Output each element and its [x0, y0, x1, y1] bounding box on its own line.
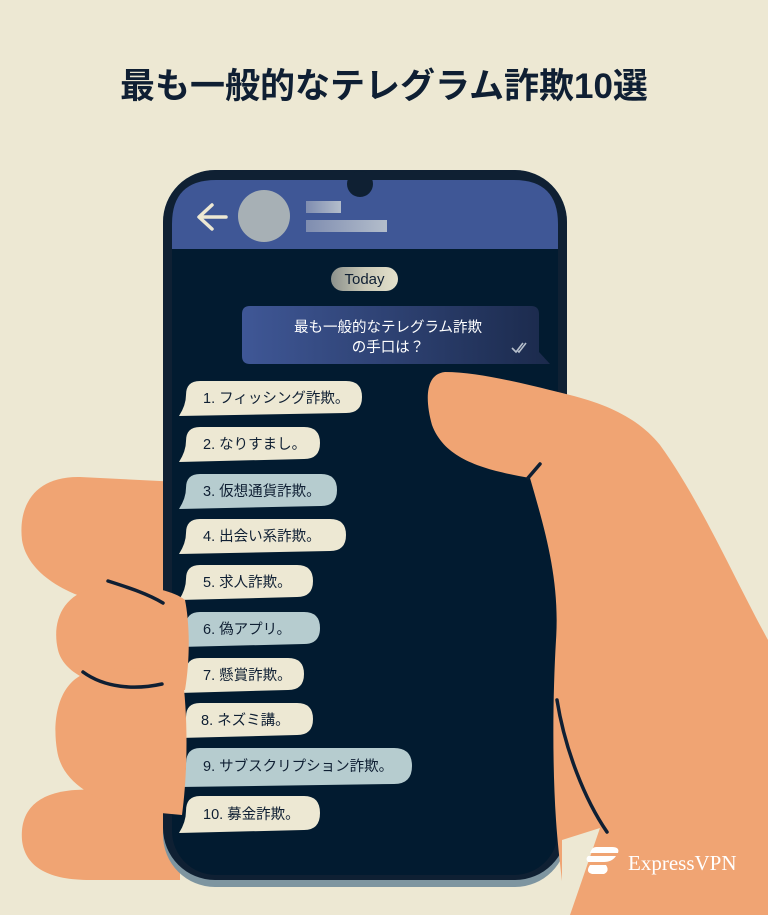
reply bubbles — [179, 381, 412, 833]
bubble 4: 4. 出会い系詐欺。 — [203, 528, 321, 545]
finger: little (behind phone) — [22, 785, 180, 880]
bubble 2 — [179, 427, 320, 462]
today pill — [331, 267, 398, 291]
bubble 7 — [179, 658, 304, 693]
title: 最も一般的なテレグラム詐欺10選 — [120, 67, 648, 106]
phone — [163, 170, 567, 887]
bubble 3 — [179, 474, 337, 509]
bubble 4 — [179, 519, 346, 554]
bubble 3: 3. 仮想通貨詐欺。 — [203, 483, 321, 500]
bubble 9: 9. サブスクリプション詐欺。 — [203, 757, 393, 775]
logo: ExpressVPN — [586, 847, 736, 875]
palm and thumb — [428, 372, 768, 915]
thumb crease — [528, 464, 540, 478]
palm bottom edge gap — [562, 828, 600, 915]
avatar — [238, 190, 290, 242]
sent message: の手口は？ — [352, 339, 424, 356]
bubble 1 — [179, 381, 362, 416]
bubble 6: 6. 偽アプリ。 — [203, 621, 291, 638]
logo: ExpressVPN: ExpressVPN — [628, 851, 736, 875]
bubble 5: 5. 求人詐欺。 — [203, 574, 292, 591]
finger: ring (front) — [55, 668, 186, 815]
notch — [347, 171, 373, 197]
sent message: 最も一般的なテレグラム詐欺 — [294, 319, 483, 336]
palm crease — [557, 700, 607, 832]
bubble 10: 10. 募金詐欺。 — [203, 806, 300, 823]
finger creases — [83, 581, 163, 687]
icon: double check — [512, 343, 526, 352]
bubble 1: 1. フィッシング詐欺。 — [203, 390, 349, 407]
bubble 8: 8. ネズミ講。 — [201, 712, 290, 729]
phone header — [172, 180, 558, 249]
sent message — [242, 306, 550, 364]
bubble 6 — [179, 612, 320, 647]
finger: middle (front) — [56, 586, 189, 690]
icon: back arrow — [199, 205, 226, 229]
bubble 10 — [179, 796, 320, 833]
bubble 8 — [179, 703, 313, 738]
finger: index (behind phone) — [21, 477, 180, 610]
bubble 9 — [179, 748, 412, 787]
today pill: Today — [344, 271, 385, 288]
bubble 7: 7. 懸賞詐欺。 — [203, 667, 292, 684]
bubble 5 — [179, 565, 313, 600]
bubble 2: 2. なりすまし。 — [203, 436, 306, 453]
